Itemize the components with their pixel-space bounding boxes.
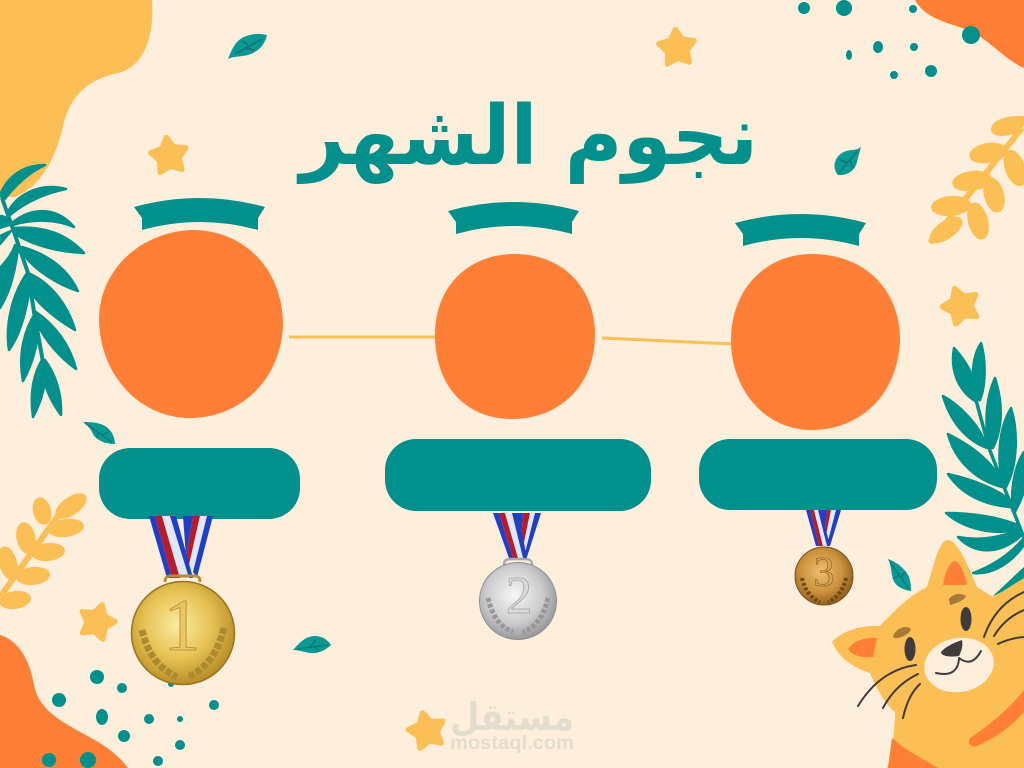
cat eyebrows [893, 594, 966, 638]
cat muzzle [920, 632, 998, 698]
blob: top left yellow [0, 0, 152, 197]
name pill 2 [385, 439, 651, 511]
small leaf icons [83, 34, 911, 653]
watermark [450, 695, 574, 754]
photo circle 3 [731, 254, 900, 430]
blob: top right orange [915, 0, 1024, 68]
decorative dots: bottom left [42, 670, 219, 768]
star icons [76, 28, 983, 641]
silver medal: 2 [506, 567, 532, 625]
banner 3 [735, 214, 866, 246]
palm leaf: right [943, 343, 1024, 573]
watermark: mostaql.com [450, 733, 574, 754]
decorative dots: top right [798, 0, 980, 79]
connector lines [289, 337, 732, 344]
cat nose and mouth [941, 640, 962, 657]
cat illustration [832, 540, 1024, 768]
panel: third place [699, 214, 937, 605]
bronze medal: 3 [814, 550, 834, 596]
palm leaf: left [0, 165, 84, 417]
palm leaf tip over cat [993, 567, 1024, 596]
panel: first place [99, 198, 300, 684]
cat ears inner [848, 561, 967, 657]
cat eyes [904, 607, 972, 661]
photo circle 1 [99, 230, 283, 418]
title: نجوم الشهر [296, 89, 758, 184]
gold medal [132, 516, 234, 684]
photo circle 2 [435, 254, 595, 419]
gold medal: 1 [164, 585, 200, 667]
panel: second place [385, 202, 651, 640]
banner 1 [134, 198, 265, 230]
blob: bottom left orange [0, 635, 128, 768]
cat collar [888, 690, 1024, 768]
banner 2 [448, 202, 579, 234]
star over watermark [405, 709, 448, 750]
sprig: bottom left yellow [0, 490, 90, 610]
sprig: top right yellow [927, 117, 1024, 247]
bronze medal [795, 510, 853, 605]
silver medal [480, 513, 556, 640]
name pill 1 [99, 448, 300, 519]
name pill 3 [699, 439, 937, 510]
cat whiskers [858, 592, 1024, 718]
watermark: مستقل [450, 695, 574, 739]
cat body [832, 540, 1024, 768]
